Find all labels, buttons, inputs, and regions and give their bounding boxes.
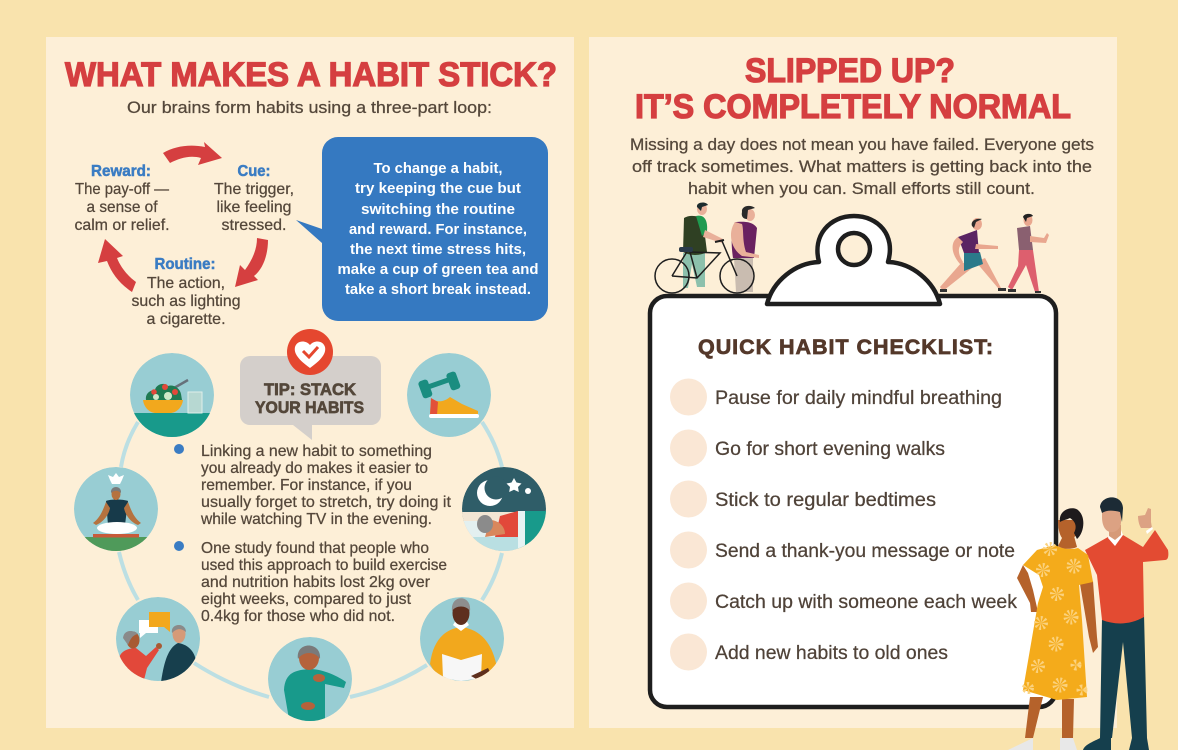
- label: reward: calm or relief.: [74, 217, 170, 234]
- panel: slipped up: [589, 37, 1117, 728]
- intro text: off track sometimes. What matters is getting back into the: [632, 158, 1092, 176]
- icon: two people talking: [116, 597, 200, 682]
- label: routine: The action,: [147, 275, 225, 292]
- icon: heart badge: [287, 329, 333, 375]
- icon: meditation: [74, 467, 158, 551]
- icon: man reading: [420, 597, 504, 681]
- label: reward: a sense of: [86, 199, 158, 216]
- checklist item 3: Stick to regular bedtimes: [715, 489, 936, 511]
- checklist clipboard: [650, 216, 1056, 707]
- checklist item 2: Go for short evening walks: [715, 438, 945, 460]
- checklist item 3: [670, 480, 936, 518]
- label: reward: Reward:: [91, 163, 151, 180]
- checklist item 6: [670, 634, 948, 670]
- tip text: bullet one: Linking a new habit to something: [201, 443, 432, 460]
- arrow: routine to reward: [98, 239, 136, 292]
- illustration: runner and walker: [940, 214, 1049, 293]
- tip text: bullet one: remember. For instance, if you: [201, 477, 412, 494]
- arrow: cue to routine: [235, 238, 268, 287]
- callout: to change a habit: the next time stress hits,: [350, 242, 526, 258]
- tip text: bullet two: 0.4kg for those who did not.: [201, 608, 395, 625]
- label: cue: like feeling: [216, 199, 292, 216]
- callout: to change a habit: try keeping the cue but: [355, 181, 521, 197]
- arrow: reward to cue: [163, 142, 222, 165]
- icon: salad bowl: [130, 353, 214, 437]
- callout: to change a habit: make a cup of green tea and: [338, 262, 538, 278]
- title: slipped up: [635, 52, 1071, 126]
- clipboard body: [650, 296, 1056, 707]
- label: routine: such as lighting: [132, 293, 240, 310]
- tip text: bullet one: while watching TV in the evening.: [200, 511, 432, 528]
- callout: to change a habit: switching the routine: [361, 202, 515, 218]
- tip text: bullet two: used this approach to build exercise: [201, 557, 447, 574]
- icon: sleeping at night: [462, 467, 546, 552]
- clipboard clip: [767, 216, 940, 304]
- tip text: bullet two: eight weeks, compared to just: [201, 591, 412, 608]
- checklist item 1: [670, 378, 1002, 416]
- callout: to change a habit: and reward. For instance,: [349, 222, 527, 238]
- checklist item 1: Pause for daily mindful breathing: [715, 387, 1002, 409]
- woman: [1008, 508, 1098, 750]
- icon: bicycle: [655, 240, 754, 293]
- label: cue: Cue:: [238, 163, 270, 180]
- tip text: bullet two: One study found that people who: [201, 540, 429, 557]
- label: cue: [214, 163, 294, 234]
- checklist item 4: Send a thank-you message or note: [715, 540, 1015, 562]
- title: what makes a habit stick: WHAT MAKES A HABIT STICK?: [65, 56, 557, 94]
- checklist heading: QUICK HABIT CHECKLIST:: [698, 335, 993, 359]
- checklist item 4: [670, 532, 1015, 568]
- callout: to change a habit: [296, 137, 548, 321]
- label: routine: [132, 256, 240, 328]
- tip text: bullet one: usually forget to stretch, try doing it: [201, 494, 452, 511]
- tip text: bullet one: [174, 443, 452, 528]
- habit loop diagram: [74, 142, 294, 328]
- icon: dumbbell and trainer: [407, 353, 491, 437]
- label: cue: The trigger,: [214, 181, 294, 198]
- panel: what makes a habit stick: [46, 37, 574, 728]
- tip text: bullet one: you already do makes it easier to: [201, 460, 428, 477]
- icon: person with hand on chest: [268, 637, 352, 725]
- intro text: habit when you can. Small efforts still count.: [688, 180, 1035, 198]
- intro text: [630, 136, 1094, 198]
- tip text: bullet two: and nutrition habits lost 2kg over: [201, 574, 431, 591]
- tip bubble: stack your habits: TIP: STACK: [264, 380, 357, 399]
- checklist item 5: Catch up with someone each week: [715, 591, 1017, 613]
- illustration: man pushing bicycle and woman: [655, 203, 759, 293]
- callout: to change a habit: take a short break instead.: [345, 282, 531, 298]
- tip bubble: stack your habits: YOUR HABITS: [255, 398, 364, 417]
- label: reward: The pay-off —: [75, 181, 169, 198]
- callout: to change a habit: To change a habit,: [374, 161, 502, 177]
- subtitle: three-part loop: Our brains form habits using a three-part loop:: [127, 99, 492, 117]
- illustration: couple giving thumbs up: [1008, 497, 1168, 750]
- habit ring connectors: [119, 422, 502, 697]
- dress flowers: [1026, 546, 1084, 692]
- label: routine: a cigarette.: [146, 311, 226, 328]
- title: slipped up: IT’S COMPLETELY NORMAL: [635, 88, 1071, 126]
- intro text: Missing a day does not mean you have failed. Everyone gets: [630, 136, 1094, 154]
- label: reward: [74, 163, 170, 234]
- label: cue: stressed.: [222, 217, 286, 234]
- label: routine: Routine:: [154, 256, 216, 273]
- tip text: bullet two: [174, 540, 447, 625]
- title: slipped up: SLIPPED UP?: [745, 52, 955, 90]
- checklist item 2: [670, 430, 945, 466]
- tip bubble: stack your habits: [240, 329, 381, 440]
- checklist item 6: Add new habits to old ones: [715, 642, 948, 664]
- man: [1083, 497, 1168, 750]
- checklist item 5: [670, 582, 1017, 620]
